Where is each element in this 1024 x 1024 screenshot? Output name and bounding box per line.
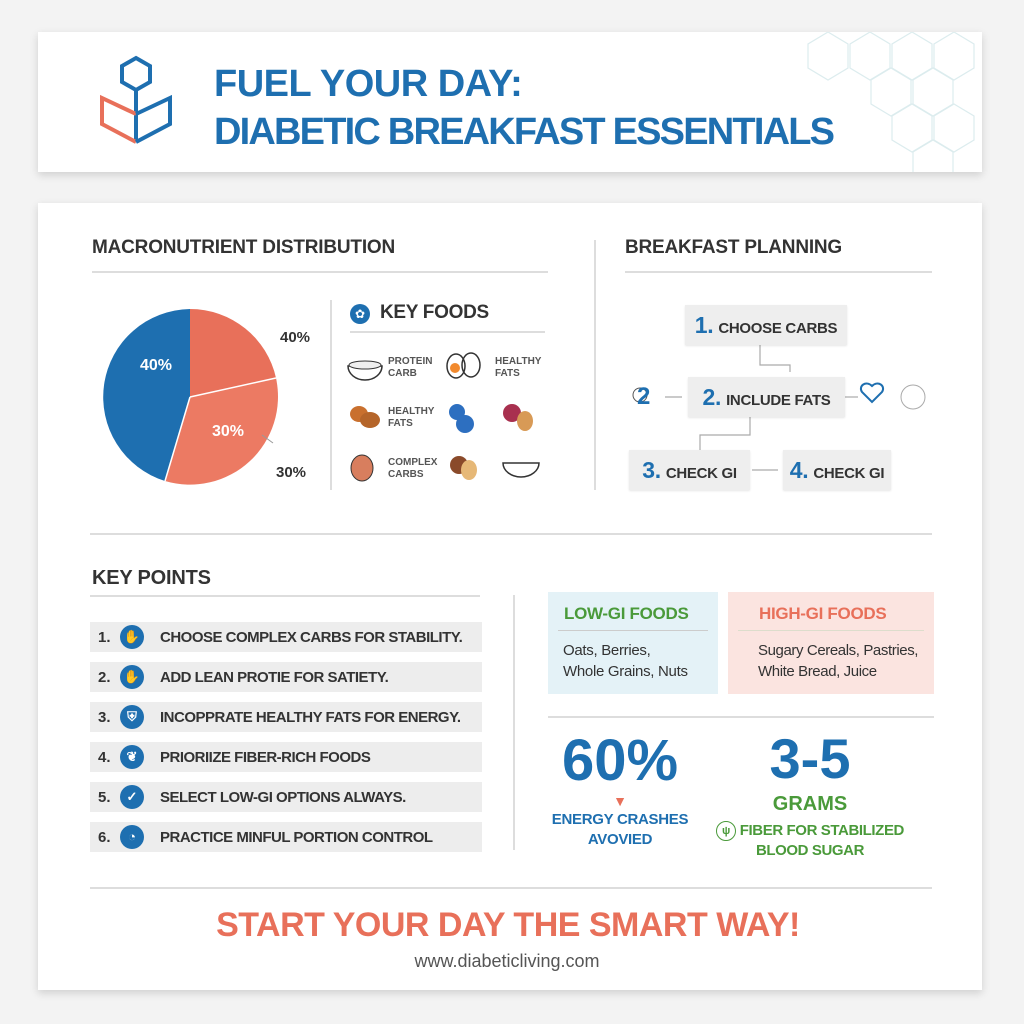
hexagon pattern <box>808 32 974 172</box>
key points list: PRIORIIZE FIBER-RICH FOODS <box>160 749 370 766</box>
stat: 3-5 grams: ψ <box>722 825 730 837</box>
key foods panel: CARBS <box>388 469 424 480</box>
stat: 3-5 grams: FIBER FOR STABILIZED <box>740 822 904 839</box>
key foods panel: HEALTHY <box>388 406 434 417</box>
food items <box>347 352 540 482</box>
pie chart <box>103 309 310 485</box>
high-GI box: White Bread, Juice <box>758 663 877 680</box>
stat: 3-5 grams: GRAMS <box>773 793 847 815</box>
heading: macronutrient distribution: MACRONUTRIENT DISTRIBUTION <box>92 237 395 258</box>
pie chart: 40% <box>280 329 310 346</box>
step 1: 1. CHOOSE CARBS <box>695 312 837 338</box>
key points list: ADD LEAN PROTIE FOR SATIETY. <box>160 669 388 686</box>
key points list: ❦ <box>127 749 137 764</box>
key foods panel: COMPLEX <box>388 457 437 468</box>
key points list: ◔ <box>128 829 136 844</box>
key points list: 4. <box>98 749 111 766</box>
stat: 60%: ENERGY CRASHES <box>552 811 688 828</box>
step 2 icon: 2 <box>637 383 650 410</box>
key points list: ✓ <box>127 789 137 804</box>
high-GI box <box>728 592 934 694</box>
key foods panel: KEY FOODS <box>380 302 489 323</box>
step 3: 3. CHECK GI <box>642 457 737 483</box>
key points list: ✋ <box>124 629 140 644</box>
flow diagram <box>628 305 926 492</box>
key points list <box>90 622 482 852</box>
url: www.diabeticliving.com <box>414 951 600 971</box>
key points list: 6. <box>98 829 111 846</box>
high-GI box: HIGH-GI FOODS <box>759 604 886 623</box>
key foods panel: FATS <box>388 418 413 429</box>
step 2: 2. INCLUDE FATS <box>702 384 831 410</box>
main card <box>38 203 982 990</box>
step 4 <box>783 450 891 490</box>
high-GI box: Sugary Cereals, Pastries, <box>758 642 918 659</box>
heading: key points: KEY POINTS <box>92 567 211 589</box>
low-GI box: LOW-GI FOODS <box>564 604 688 623</box>
stat: 3-5 grams: 3-5 <box>770 727 850 790</box>
key points list: ✋ <box>124 669 140 684</box>
key points list: 2. <box>98 669 111 686</box>
stat: 60%: 60% <box>562 728 678 793</box>
low-GI box: Oats, Berries, <box>563 642 650 659</box>
stat: 60% <box>552 728 688 848</box>
key foods panel: FATS <box>495 368 520 379</box>
stat: 60%: ▼ <box>613 793 627 809</box>
step 2 <box>688 377 845 417</box>
key points list: 5. <box>98 789 111 806</box>
key points list: ⛨ <box>127 709 137 724</box>
key points list: INCOPPRATE HEALTHY FATS FOR ENERGY. <box>160 709 461 726</box>
pie chart: 30% <box>212 423 244 440</box>
call to action: START YOUR DAY THE SMART WAY! <box>216 906 800 944</box>
step 1 <box>685 305 847 345</box>
stat: 3-5 grams: BLOOD SUGAR <box>756 842 864 859</box>
key points list: PRACTICE MINFUL PORTION CONTROL <box>160 829 433 846</box>
step 4: 4. CHECK GI <box>790 457 884 483</box>
step 3 <box>629 450 750 490</box>
key foods panel: HEALTHY <box>495 356 541 367</box>
heading: breakfast planning: BREAKFAST PLANNING <box>625 237 842 258</box>
low-GI box <box>548 592 718 694</box>
pie chart: 30% <box>276 464 306 481</box>
title: DIABETIC BREAKFAST ESSENTIALS <box>214 111 833 153</box>
pie chart: 40% <box>140 357 172 374</box>
key points list: SELECT LOW-GI OPTIONS ALWAYS. <box>160 789 406 806</box>
header card <box>38 32 982 172</box>
key foods panel <box>347 302 545 482</box>
key points list: CHOOSE COMPLEX CARBS FOR STABILITY. <box>160 629 462 646</box>
title <box>214 63 834 153</box>
low-GI box: Whole Grains, Nuts <box>563 663 688 680</box>
icon: key foods <box>350 304 370 324</box>
stat: 3-5 grams <box>716 727 904 859</box>
key foods panel: PROTEIN <box>388 356 432 367</box>
key points list: 1. <box>98 629 111 646</box>
icon: key foods: ✿ <box>355 307 365 321</box>
key foods panel: CARB <box>388 368 417 379</box>
stat: 60%: AVOVIED <box>588 831 652 848</box>
key points list: 3. <box>98 709 111 726</box>
icon: logo <box>100 56 172 144</box>
title: FUEL YOUR DAY: <box>214 63 522 105</box>
